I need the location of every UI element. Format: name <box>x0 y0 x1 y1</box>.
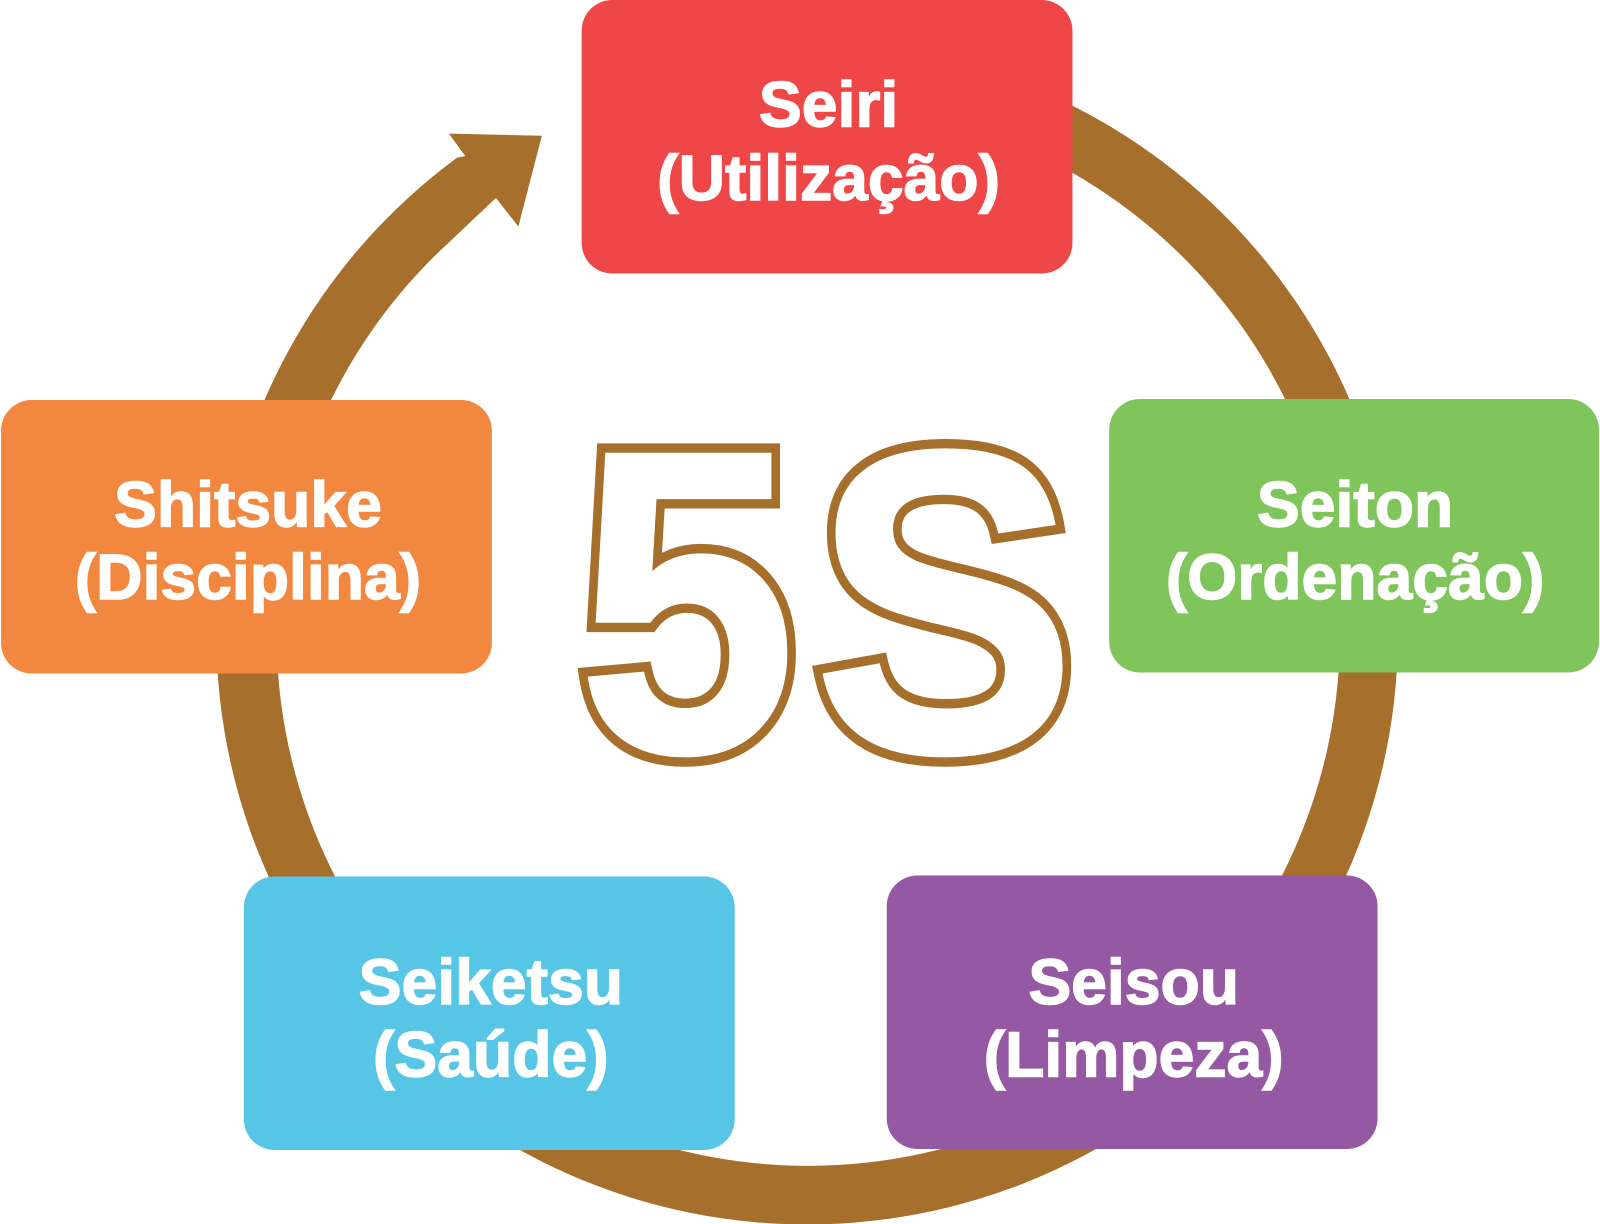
center title: 5S: 5 <box>577 361 797 845</box>
panel: Seiketsu (Saúde): (Saúde) <box>373 1019 609 1091</box>
panel: Seiketsu (Saúde) <box>244 877 735 1150</box>
center title: 5S <box>577 361 1077 845</box>
center title: 5S: S <box>812 361 1077 845</box>
panel: Seiketsu (Saúde): Seiketsu <box>359 946 623 1018</box>
panel: Seiton (Ordenação): (Ordenação) <box>1166 541 1544 613</box>
center title: 5S: 5 <box>577 361 797 845</box>
panel: Shitsuke (Disciplina) <box>1 400 492 673</box>
panel: Seisou (Limpeza): Seisou <box>1028 946 1239 1018</box>
panel: Shitsuke (Disciplina): (Disciplina) <box>75 541 421 613</box>
panel: Seiton (Ordenação) <box>1109 399 1599 672</box>
panel: Seiri (Utilização) <box>582 0 1072 273</box>
center title: 5S: S <box>812 361 1077 845</box>
panel: Seisou (Limpeza) <box>887 876 1378 1149</box>
panel: Shitsuke (Disciplina): Shitsuke <box>114 469 382 541</box>
panel: Seiton (Ordenação): Seiton <box>1257 469 1453 541</box>
circular arrow <box>216 83 1398 1224</box>
panel: Seiri (Utilização): (Utilização) <box>657 142 1000 214</box>
panel: Seisou (Limpeza): (Limpeza) <box>984 1019 1284 1091</box>
panel: Seiri (Utilização): Seiri <box>759 69 898 141</box>
